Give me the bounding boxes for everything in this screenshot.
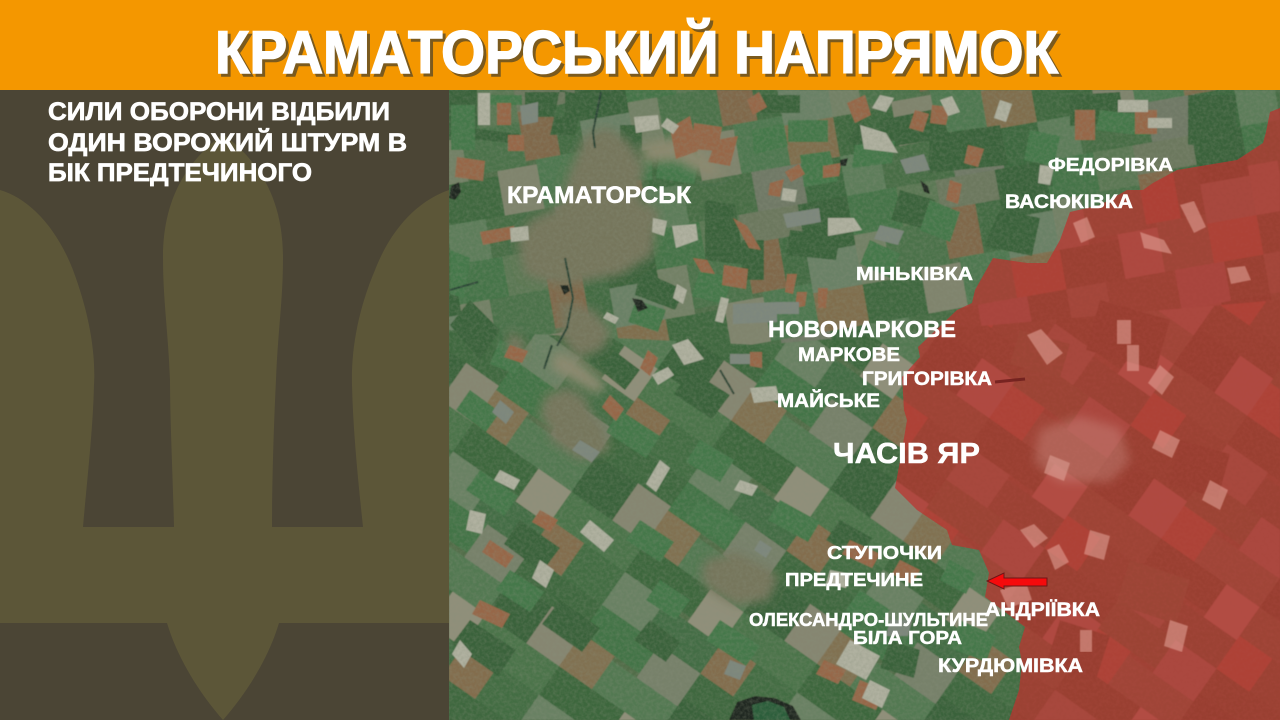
town area: Bakhmut [1034, 416, 1130, 482]
label: Новомаркове: НОВОМАРКОВЕ [768, 316, 956, 342]
satellite fields [449, 90, 1280, 720]
text block: summary: СИЛИ ОБОРОНИ ВІДБИЛИ [48, 98, 390, 126]
label: Андріївка: АНДРІЇВКА [985, 600, 1100, 621]
title: КРАМАТОРСЬКИЙ НАПРЯМОК [215, 19, 1058, 86]
label: Предтечине: ПРЕДТЕЧИНЕ [785, 569, 923, 590]
header banner [0, 0, 1280, 90]
label: Курдюмівка: КУРДЮМІВКА [938, 656, 1083, 677]
text block: summary [48, 98, 407, 187]
grey fields [492, 102, 930, 680]
label: Ступочки: СТУПОЧКИ [827, 542, 942, 563]
label: Маркове: МАРКОВЕ [798, 345, 900, 366]
rust ploughed fields [455, 92, 1157, 710]
pale fields inside occupied area [1000, 201, 1251, 652]
urban areas and quarries [506, 127, 779, 606]
label: Міньківка: МІНЬКІВКА [856, 263, 973, 284]
text block: summary: БІК ПРЕДТЕЧИНОГО [48, 159, 312, 187]
label: Федорівка: ФЕДОРІВКА [1048, 154, 1173, 175]
label: Майське: МАЙСЬКЕ [777, 390, 880, 412]
label: Васюківка: ВАСЮКІВКА [1005, 192, 1133, 213]
texture grain [449, 90, 1280, 720]
label: Краматорськ: КРАМАТОРСЬК [507, 182, 691, 209]
panel: left info panel [0, 90, 449, 720]
label: Біла Гора: БІЛА ГОРА [853, 627, 962, 648]
dark rivers and ponds [450, 92, 734, 394]
label: Часів Яр: ЧАСІВ ЯР [833, 438, 980, 470]
dark green fields [449, 90, 1236, 680]
dark trench marks in occupied area [995, 379, 1025, 382]
occupied territory overlay [895, 108, 1280, 720]
arrow: direction of assault [987, 573, 1047, 589]
panel: satellite map [449, 90, 1280, 720]
text block: summary: ОДИН ВОРОЖИЙ ШТУРМ В [48, 127, 407, 157]
mid green fields [450, 95, 1190, 666]
pale bare fields [452, 93, 1172, 708]
label group: settlements [507, 154, 1173, 677]
trident emblem background [0, 134, 449, 720]
title: КРАМАТОРСЬКИЙ НАПРЯМОК [218, 22, 1061, 89]
muted tone layer [449, 90, 1280, 720]
label: Григорівка: ГРИГОРІВКА [862, 369, 992, 390]
label: Олександро-Шультине: ОЛЕКСАНДРО-ШУЛЬТИНЕ [749, 610, 988, 630]
